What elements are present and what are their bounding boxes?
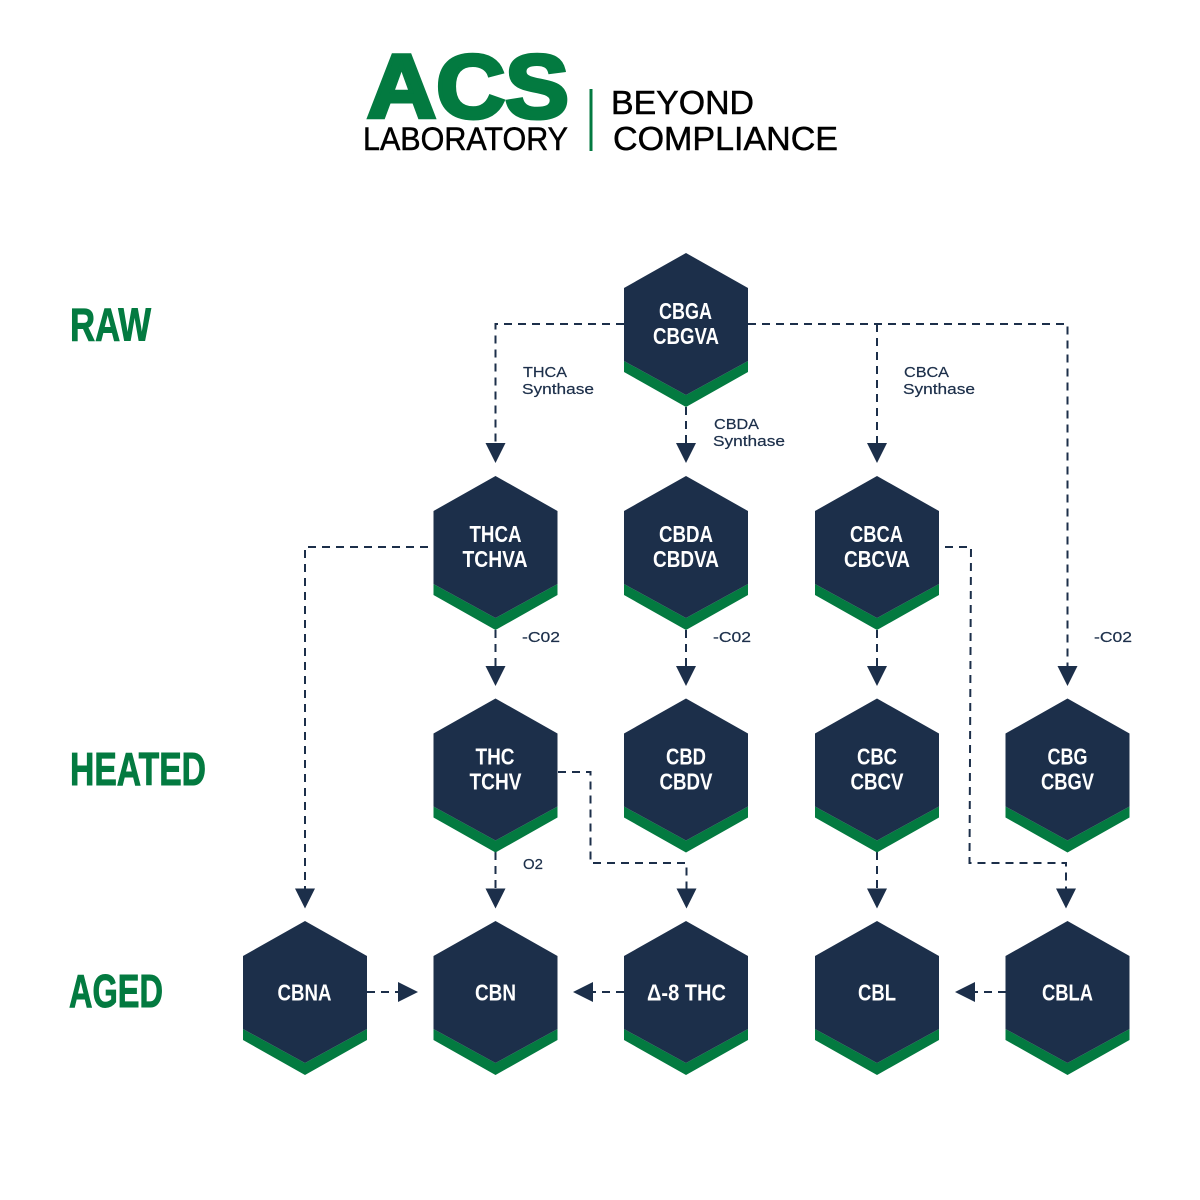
label: CBDA Synthase: CBDA — [714, 416, 759, 433]
hexagon: THCA TCHVA — [434, 476, 558, 630]
hexagon: CBD CBDV: CBD — [666, 744, 706, 770]
hexagon: CBLA — [1006, 921, 1130, 1075]
label: THCA Synthase — [522, 364, 594, 398]
label: CBDA Synthase — [713, 416, 785, 450]
hexagon: CBLA: CBLA — [1042, 980, 1093, 1006]
hexagon: CBD CBDV — [624, 698, 748, 852]
label: THCA Synthase: THCA — [523, 364, 567, 381]
logo — [363, 38, 838, 157]
hexagon: THCA TCHVA: THCA — [470, 521, 522, 547]
hexagon: delta-8 THC — [624, 921, 748, 1075]
hexagon: CBL: CBL — [858, 980, 896, 1006]
label: CBCA Synthase: CBCA — [904, 364, 949, 381]
hexagon: THC TCHV — [434, 698, 558, 852]
hexagon: CBC CBCV: CBCV — [850, 768, 904, 794]
hexagon: CBCA CBCVA: CBCVA — [844, 546, 910, 572]
logo wordmark: LABORATORY: LABORATORY — [363, 121, 568, 157]
hexagon: THCA TCHVA: TCHVA — [462, 546, 528, 572]
stage heading: AGED: AGED — [69, 965, 163, 1017]
hexagon: CBGA CBGVA — [624, 253, 748, 407]
arrowheads — [295, 443, 1078, 1002]
label: CBDA Synthase: Synthase — [713, 433, 785, 450]
hexagon: CBGA CBGVA: CBGA — [659, 298, 712, 324]
hexagon: CBL — [815, 921, 939, 1075]
tagline: BEYOND: BEYOND — [611, 84, 754, 121]
label: THCA Synthase: Synthase — [522, 381, 594, 398]
hexagon: CBCA CBCVA: CBCA — [850, 521, 903, 547]
label: -CO2 above CBG: -C02 — [1094, 629, 1132, 646]
label: CBCA Synthase — [903, 364, 975, 398]
hexagon: CBC CBCV: CBC — [857, 744, 897, 770]
label: -CO2 under CBDA: -C02 — [713, 629, 751, 646]
stage heading: RAW: RAW — [70, 298, 151, 350]
hexagon: CBCA CBCVA — [815, 476, 939, 630]
logo wordmark: ACS: ACS — [367, 38, 569, 138]
connector lines — [305, 324, 1068, 992]
hexagon: THC TCHV: THC — [476, 744, 514, 770]
label: -CO2 under THCA: -C02 — [522, 629, 560, 646]
hexagon: CBNA — [243, 921, 367, 1075]
hexagon: CBGA CBGVA: CBGVA — [653, 323, 719, 349]
hexagon: CBN: CBN — [475, 980, 516, 1006]
hexagon: CBG CBGV — [1006, 698, 1130, 852]
stage heading: HEATED: HEATED — [70, 743, 206, 795]
logo divider — [590, 89, 592, 151]
tagline: COMPLIANCE: COMPLIANCE — [613, 120, 838, 157]
hexagon: THC TCHV: TCHV — [470, 768, 522, 794]
hexagon: CBDA CBDVA — [624, 476, 748, 630]
hexagon: CBG CBGV: CBGV — [1041, 768, 1095, 794]
label: O2: O2 — [523, 856, 543, 873]
hexagon: delta-8 THC: Δ-8 THC — [647, 980, 726, 1006]
hexagon: CBC CBCV — [815, 698, 939, 852]
hexagon: CBNA: CBNA — [278, 980, 332, 1006]
label: CBCA Synthase: Synthase — [903, 381, 975, 398]
hexagon: CBDA CBDVA: CBDVA — [653, 546, 719, 572]
hexagon: CBG CBGV: CBG — [1048, 744, 1088, 770]
hexagon: CBN — [434, 921, 558, 1075]
hexagon: CBD CBDV: CBDV — [660, 768, 713, 794]
hexagon: CBDA CBDVA: CBDA — [659, 521, 713, 547]
